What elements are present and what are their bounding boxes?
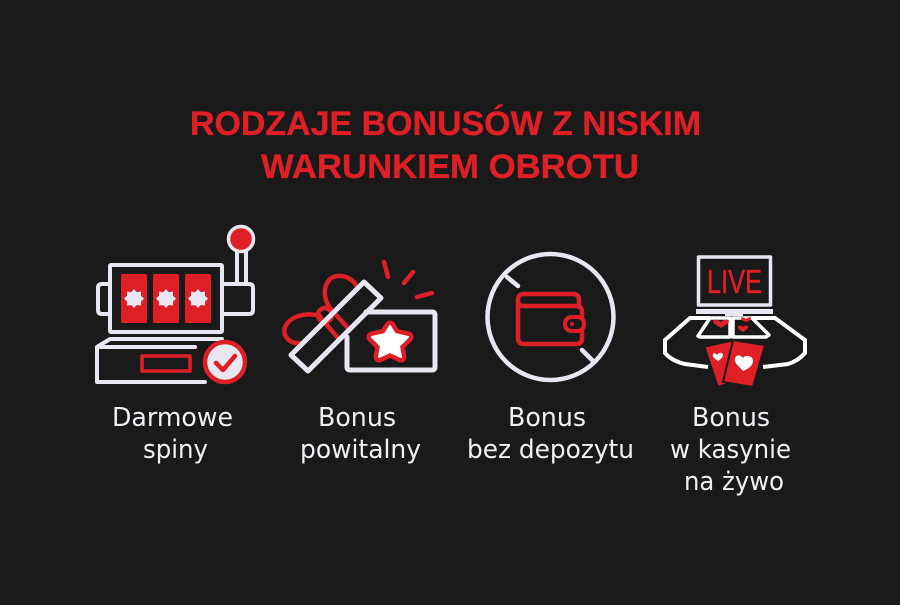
label: Bonus bez depozytu: [467, 403, 634, 465]
icon: live casino: LIVE: [707, 263, 762, 300]
title: WARUNKIEM OBROTU: [261, 148, 639, 186]
label: Bonus bez depozytu: Bonus: [508, 403, 586, 433]
title: [190, 105, 701, 186]
label: Darmowe spiny: Darmowe: [112, 403, 233, 433]
label: Bonus powitalny: powitalny: [300, 435, 421, 465]
icon: slot machine: [97, 226, 254, 382]
label: Bonus w kasynie na żywo: [670, 403, 791, 497]
icon: gift box: [284, 262, 435, 371]
label: Bonus bez depozytu: bez depozytu: [467, 435, 634, 465]
label: Bonus w kasynie na żywo: Bonus: [692, 403, 770, 433]
label: Darmowe spiny: spiny: [143, 435, 208, 465]
label: Bonus powitalny: Bonus: [318, 403, 396, 433]
icon: live casino: [665, 257, 805, 387]
label: Bonus w kasynie na żywo: na żywo: [684, 467, 784, 497]
icon: no-deposit wallet: [488, 254, 614, 380]
label: Darmowe spiny: [112, 403, 233, 465]
label: Bonus w kasynie na żywo: w kasynie: [670, 435, 791, 465]
title: RODZAJE BONUSÓW Z NISKIM: [190, 105, 701, 143]
label: Bonus powitalny: [300, 403, 421, 465]
